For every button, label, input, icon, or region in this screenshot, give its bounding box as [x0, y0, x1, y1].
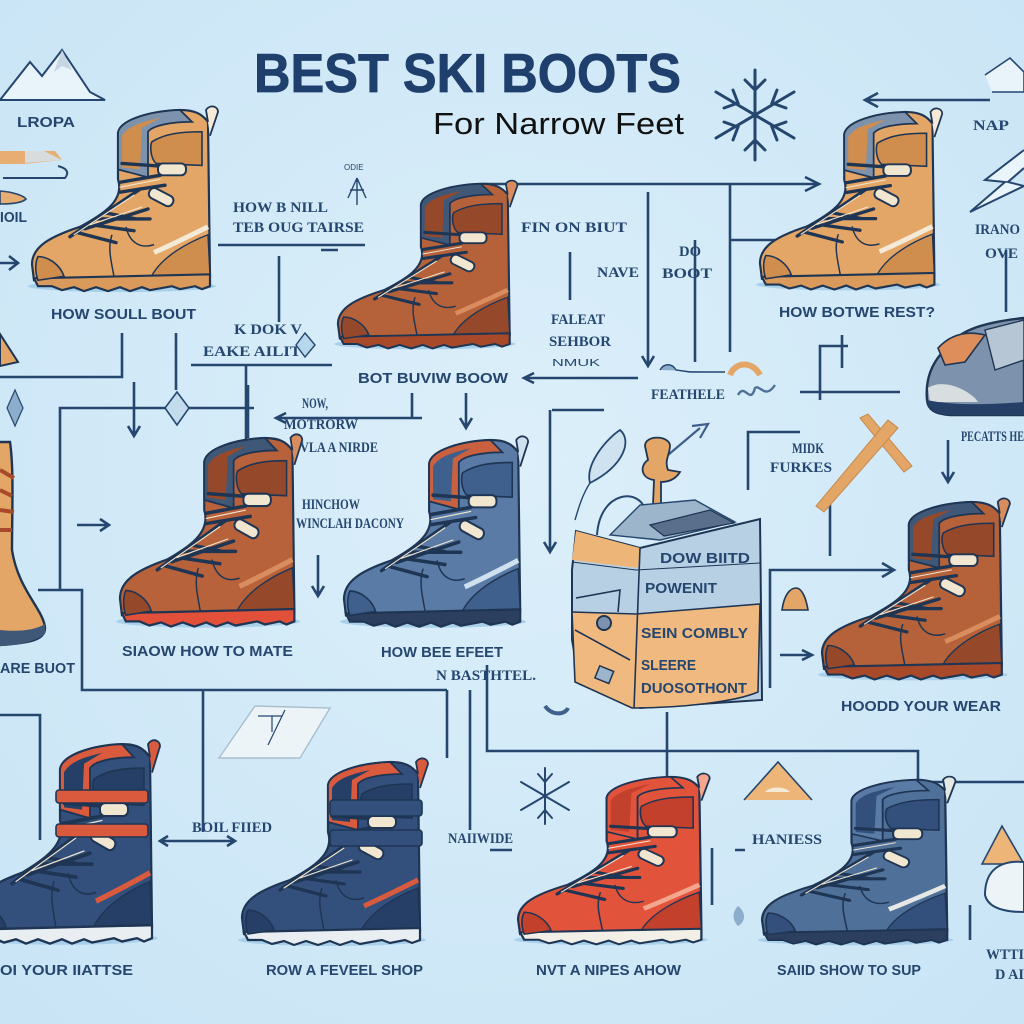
boot: blue right bottom — [758, 777, 956, 945]
label: SAIID SHOW TO SUP — [777, 963, 921, 979]
boot: brown centre-top — [334, 181, 517, 349]
boot: tan top-right — [756, 108, 942, 290]
text on box: POWENIT — [645, 581, 717, 597]
label: SIAOW HOW TO MATE — [122, 644, 293, 660]
icon: lightning — [970, 150, 1024, 212]
icon: feather cluster — [660, 364, 775, 395]
label: NMUK — [552, 358, 601, 369]
label — [296, 497, 404, 532]
label: OI YOUR IIATTSE — [0, 963, 133, 979]
label: NAVE — [597, 265, 639, 281]
label: EAKE AILIT — [203, 344, 301, 360]
label: FIN ON BIUT — [521, 220, 627, 236]
boot: tan left edge — [0, 442, 45, 646]
panel: box with feather and handle — [572, 424, 762, 708]
label: HOW SOULL BOUT — [51, 307, 196, 323]
icon: diamond — [165, 392, 189, 425]
label: MIDK — [792, 441, 825, 457]
text on box: SEIN COMBLY — [641, 626, 748, 642]
label: HOW BOTWE REST? — [779, 305, 935, 321]
label: FALEAT — [551, 312, 605, 328]
icon: left ski pieces — [0, 151, 67, 204]
label: feathele: FEATHELE — [651, 387, 725, 403]
label: SEHBOR — [549, 334, 612, 350]
icon: bell — [782, 588, 808, 610]
icon: folded map — [219, 706, 330, 758]
label: BOT BUVIW BOOW — [358, 371, 508, 387]
icon: mountain right edge — [982, 826, 1024, 864]
text on box — [641, 551, 750, 697]
label — [284, 396, 378, 456]
label: VLA A NIRDE — [300, 440, 378, 456]
boot: brown left centre — [116, 434, 302, 628]
icon: feather — [589, 430, 625, 483]
label — [975, 222, 1020, 262]
icon: mountain top-right — [985, 58, 1024, 92]
shoe: right edge — [927, 318, 1024, 415]
label: BOIL FIIED — [192, 820, 272, 836]
boot: blue centre — [340, 436, 528, 628]
label — [986, 947, 1024, 983]
label: HINCHOW — [302, 497, 360, 513]
icon: arrow — [668, 424, 708, 455]
label: Hoil: IOIL — [0, 210, 27, 226]
label: TEB OUG TAIRSE — [233, 220, 364, 236]
label: K DOK V — [234, 322, 303, 338]
icon: small leaf — [734, 906, 744, 926]
label: D AI — [995, 967, 1024, 983]
boot: navy centre — [238, 758, 428, 946]
shoe fragment right — [985, 862, 1024, 912]
text on box: SLEERE — [641, 658, 696, 674]
label: HOODD YOUR WEAR — [841, 699, 1002, 715]
label — [233, 200, 364, 236]
label: NAIIWIDE — [448, 831, 513, 847]
left small boot piece — [0, 334, 18, 366]
label — [770, 441, 832, 476]
icon: handle — [643, 438, 680, 530]
straps: navy bottom-left — [56, 790, 148, 837]
label: HANIESS — [752, 832, 822, 848]
map marks — [258, 710, 285, 745]
icon: small tree with label — [344, 163, 366, 205]
label: BOOT — [662, 266, 712, 282]
label: NAP — [973, 118, 1009, 134]
arc accent — [545, 706, 568, 713]
label: ARE BUOT — [0, 661, 75, 677]
icon: crossed skis — [816, 414, 912, 512]
icon: diamond — [296, 333, 315, 357]
boot: brown right — [818, 498, 1010, 680]
label: N BASTHTEL. — [436, 668, 536, 684]
label: NVT A NIPES AHOW — [536, 963, 681, 979]
subtitle: For Narrow Feet — [433, 106, 684, 141]
label: FURKES — [770, 460, 832, 476]
label: HOW BEE EFEET — [381, 645, 503, 661]
label: Lropa: LROPA — [17, 115, 76, 131]
snowflake: top — [716, 70, 794, 160]
title: BEST SKI BOOTS — [254, 42, 681, 104]
boot: tan top-left — [28, 106, 218, 292]
label — [549, 312, 612, 369]
label: IRANO — [975, 222, 1020, 238]
label — [203, 322, 303, 360]
label: NOW, — [302, 396, 328, 412]
icon: mountains top-left — [0, 50, 105, 100]
label: HOW B NILL — [233, 200, 328, 216]
text on box: DUOSOTHONT — [641, 681, 747, 697]
icon: orange mountain — [744, 762, 812, 800]
icon: left diamond — [7, 390, 23, 426]
label — [662, 244, 712, 282]
label: OVE — [985, 246, 1018, 262]
boot: red — [514, 774, 710, 945]
text on box: DOW BIITD — [660, 551, 750, 567]
label: MOTRORW — [284, 417, 358, 433]
label: WINCLAH DACONY — [296, 516, 404, 532]
straps: navy centre — [330, 800, 422, 846]
label: ROW A FEVEEL SHOP — [266, 963, 423, 979]
boot: navy bottom-left — [0, 740, 160, 945]
icon: small tree with label: ODIE — [344, 163, 364, 172]
icon: snowflake small — [521, 768, 569, 824]
label: DO — [679, 244, 701, 260]
